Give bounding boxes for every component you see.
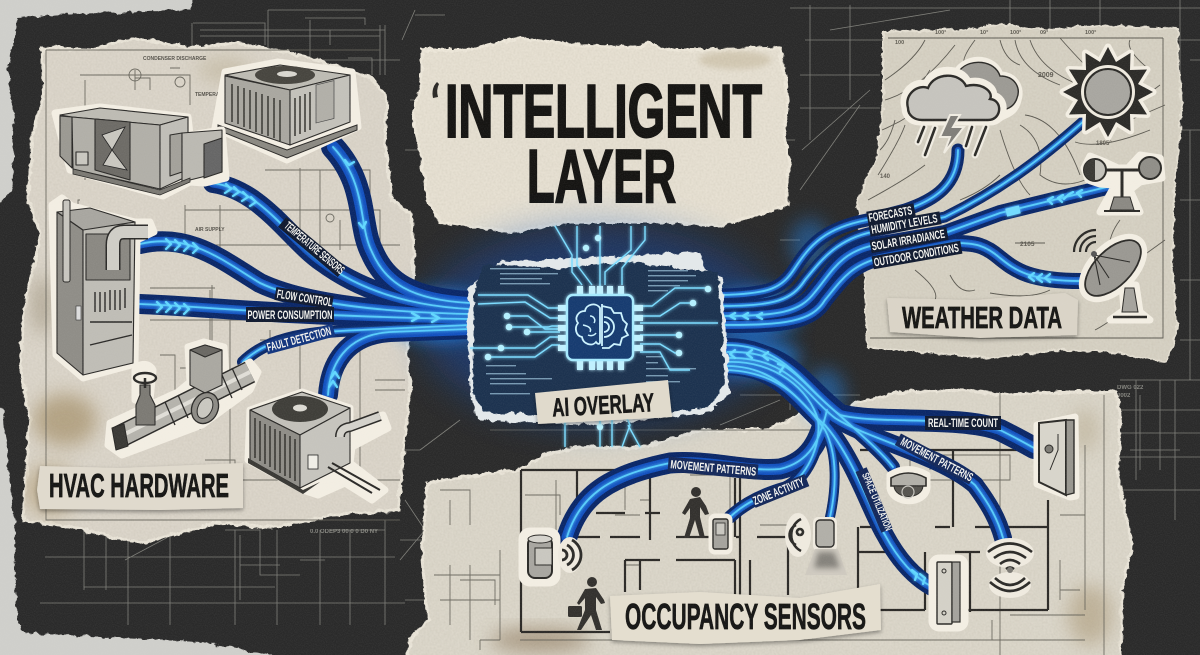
cable label: temperature sensors bbox=[278, 217, 347, 277]
panel: intelligent layer title paper bbox=[412, 38, 790, 232]
icon: signal sensor bbox=[785, 513, 847, 575]
label: occupancy sensors bbox=[610, 584, 881, 644]
icon: wall sensor bbox=[712, 517, 729, 551]
cable label: solar irradiance: SOLAR IRRADIANCE bbox=[871, 227, 946, 253]
icon: walking person bbox=[682, 487, 709, 538]
contour map lines: 10° bbox=[980, 30, 988, 36]
cable label: fault detection bbox=[265, 324, 335, 354]
icon: furnace bbox=[52, 198, 154, 378]
contour map lines bbox=[868, 30, 1165, 338]
label: HVAC hardware bbox=[37, 463, 243, 510]
panel: occupancy sensors bbox=[405, 390, 1132, 655]
cable label: space utilization bbox=[856, 467, 893, 533]
icon: anemometer bbox=[1084, 155, 1162, 212]
cable label: movement patterns left bbox=[668, 457, 758, 479]
cable label: movement patterns left: MOVEMENT PATTERNS bbox=[670, 457, 757, 479]
icon: satellite dish bbox=[1071, 226, 1155, 320]
code text lines on overlay bbox=[486, 268, 696, 394]
icon: bar sensor bbox=[932, 558, 965, 628]
cable label: flow control bbox=[274, 287, 334, 309]
text: faint blueprint labels on board bbox=[310, 385, 1144, 535]
cable label: space utilization: SPACE UTILIZATION bbox=[859, 471, 893, 533]
icon: duct and valve assembly bbox=[108, 342, 258, 455]
cable label: real-time count bbox=[925, 416, 1001, 430]
icon: sun bbox=[1063, 47, 1153, 137]
stains on HVAC paper bbox=[24, 58, 253, 516]
icon: wifi sensor bbox=[986, 538, 1034, 598]
contour map lines: 100° bbox=[1085, 30, 1096, 36]
cables: occupancy to AI overlay bbox=[567, 345, 1034, 587]
blueprint schematic on HVAC paper: TEMPERATURE bbox=[195, 92, 233, 98]
cable label: real-time count: REAL-TIME COUNT bbox=[928, 416, 998, 430]
cable label: humidity levels bbox=[868, 211, 942, 237]
label: weather data: WEATHER DATA bbox=[902, 300, 1062, 335]
blueprint schematic on HVAC paper: AIR SUPPLY bbox=[195, 227, 225, 233]
contour map lines: 2009 bbox=[1038, 72, 1054, 79]
text: faint blueprint labels on board: 0.0 ODEP3 00 0 0 D0 NY bbox=[310, 529, 378, 535]
title stain bbox=[699, 51, 771, 69]
glow: central energy bloom bbox=[390, 219, 845, 425]
icon: dome camera bbox=[890, 470, 927, 501]
cable label: power consumption bbox=[246, 307, 334, 322]
contour map lines: 140 bbox=[880, 174, 891, 180]
cable label: humidity levels: HUMIDITY LEVELS bbox=[870, 211, 939, 237]
text: faint blueprint labels on board: 0002 bbox=[1117, 393, 1131, 399]
cable label: fault detection: FAULT DETECTION bbox=[265, 324, 333, 354]
label: occupancy sensors: OCCUPANCY SENSORS bbox=[625, 596, 866, 637]
blueprint schematic on HVAC paper: CONDENSER DISCHARGE bbox=[143, 56, 207, 62]
cable label: flow control: FLOW CONTROL bbox=[276, 287, 333, 309]
stains on occupancy paper bbox=[490, 408, 1112, 652]
contour map lines: 100 bbox=[895, 40, 904, 46]
contour map lines: 100° bbox=[935, 30, 946, 36]
label: weather data bbox=[887, 293, 1078, 338]
icon: rooftop unit bbox=[215, 62, 358, 160]
title text: INTELLIGENT bbox=[445, 69, 762, 153]
text: faint blueprint labels on board: DWG 022 bbox=[1117, 385, 1144, 391]
icon: air handling unit bbox=[55, 107, 226, 196]
cables: weather to AI overlay bbox=[722, 120, 1115, 325]
cable label: movement patterns right bbox=[895, 434, 975, 484]
icon: AI chip with brain and gear bbox=[558, 286, 643, 370]
contour map lines: 1805° bbox=[1096, 141, 1112, 147]
icon: door sensor bbox=[1037, 417, 1076, 497]
icon: condenser unit bbox=[248, 392, 388, 500]
cable label: solar irradiance bbox=[869, 227, 949, 253]
circuit traces from chip bbox=[470, 286, 718, 370]
cable label: power consumption: POWER CONSUMPTION bbox=[248, 308, 332, 322]
icon: person with briefcase bbox=[568, 577, 605, 630]
cable label: forecasts bbox=[866, 203, 916, 225]
contour map lines: 2105 bbox=[1020, 241, 1035, 248]
contour map lines: 09° bbox=[1040, 30, 1048, 36]
label: AI overlay: AI OVERLAY bbox=[551, 387, 655, 422]
blueprint schematic on HVAC paper bbox=[46, 50, 405, 520]
cable label: outdoor conditions: OUTDOOR CONDITIONS bbox=[873, 241, 960, 269]
title text: LAYER bbox=[527, 134, 676, 218]
cable label: temperature sensors: TEMPERATURE SENSORS bbox=[282, 219, 347, 277]
cable label: movement patterns right: MOVEMENT PATTERNS bbox=[898, 435, 975, 484]
cable label: zone activity: ZONE ACTIVITY bbox=[751, 475, 806, 508]
floor plan bbox=[434, 393, 1104, 655]
cables: HVAC to AI overlay bbox=[140, 147, 470, 395]
label: AI overlay bbox=[535, 380, 672, 424]
icon: motion sensor with waves bbox=[522, 531, 582, 583]
panel: HVAC hardware bbox=[20, 38, 414, 543]
contour map lines: 100° bbox=[1010, 30, 1021, 36]
cable label: forecasts: FORECASTS bbox=[867, 203, 913, 225]
label: HVAC hardware: HVAC HARDWARE bbox=[49, 467, 229, 504]
circuit traces above and below chip bbox=[555, 226, 645, 447]
panel: weather data bbox=[857, 24, 1182, 362]
panel: AI overlay blueprint paper bbox=[467, 252, 730, 425]
cable label: zone activity bbox=[751, 474, 809, 508]
cable label: outdoor conditions bbox=[872, 241, 962, 269]
title text bbox=[432, 69, 762, 218]
icon: storm cloud bbox=[904, 60, 1019, 155]
